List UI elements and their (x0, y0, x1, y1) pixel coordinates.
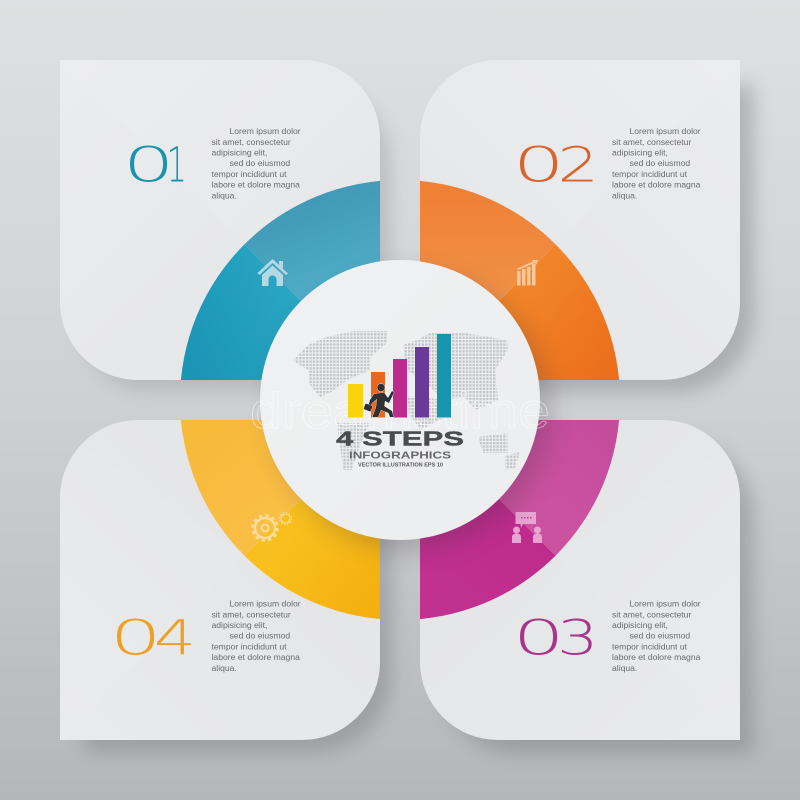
panel 4: step 04 (60, 420, 380, 740)
number: 02: 0 (513, 137, 565, 193)
text block: step 02: tempor incididunt ut (612, 169, 688, 179)
icon: running businessman (364, 384, 394, 417)
number: 04: 0 (110, 610, 162, 666)
text block: step 04: Lorem ipsum dolor (230, 598, 301, 608)
text block: step 02: aliqua. (612, 190, 637, 200)
text block: step 01: labore et dolore magna (212, 180, 300, 190)
watermark: dreamstime (250, 383, 550, 439)
text block: step 04: aliqua. (212, 663, 237, 673)
subtitle: INFOGRAPHICS (349, 450, 451, 462)
text block: step 02: sed do eiusmod (630, 158, 690, 168)
title: 4 STEPS (336, 428, 464, 450)
text block: step 01: sed do eiusmod (230, 158, 290, 168)
text block: step 04: sed do eiusmod (230, 631, 290, 641)
icon: two people talking (512, 512, 542, 543)
text block: step 04: adipisicing elit, (212, 620, 267, 630)
number: 03 (513, 610, 599, 666)
number: 02 (513, 137, 599, 193)
text block: step 01: tempor incididunt ut (212, 169, 287, 179)
text block: step 03: tempor incididunt ut (612, 641, 688, 651)
center circle shadow (271, 271, 551, 551)
panel 2: step 02 (420, 60, 740, 380)
panel shadows (80, 85, 754, 754)
ring segment: orange (420, 180, 620, 380)
text block: step 03: sit amet, consectetur (612, 609, 691, 619)
text block: step 02: Lorem ipsum dolor (630, 126, 701, 136)
text block: step 01: Lorem ipsum dolor (230, 126, 301, 136)
ring segment: magenta (420, 420, 620, 620)
number: 02: 2 (558, 137, 599, 193)
icon: rising bar chart (517, 260, 538, 286)
number: 01: 0 (123, 137, 175, 193)
icon: house (258, 259, 288, 286)
text block: step 01: aliqua. (212, 190, 237, 200)
text block: step 01: sit amet, consectetur (212, 137, 291, 147)
number: 04: 4 (154, 610, 196, 666)
text block: step 04: labore et dolore magna (212, 652, 300, 662)
icon: gears (252, 512, 292, 540)
number: 03: 0 (513, 610, 565, 666)
number: 03: 3 (557, 610, 599, 666)
panel 3: step 03 (420, 420, 740, 740)
text block: step 03: Lorem ipsum dolor (630, 598, 701, 608)
text block: step 02: sit amet, consectetur (612, 137, 691, 147)
ring segment: yellow (180, 420, 380, 620)
text block: step 01: adipisicing elit, (212, 148, 267, 158)
number: 01: 1 (166, 137, 187, 193)
text block: step 04: tempor incididunt ut (212, 641, 287, 651)
center circle (250, 260, 550, 540)
caption: VECTOR ILLUSTRATION EPS 10 (358, 462, 443, 468)
text block: step 03: adipisicing elit, (612, 620, 668, 630)
dotted world map (293, 331, 520, 470)
panel 1: step 01 (60, 60, 380, 380)
number: 04 (110, 610, 196, 666)
text block: step 02: labore et dolore magna (612, 180, 701, 190)
text block: step 03: labore et dolore magna (612, 652, 701, 662)
text block: step 03: sed do eiusmod (630, 631, 690, 641)
bar chart (348, 334, 451, 418)
ring segment: teal (180, 180, 380, 380)
text block: step 04: sit amet, consectetur (212, 609, 291, 619)
text block: step 02: adipisicing elit, (612, 148, 668, 158)
text block: step 03: aliqua. (612, 663, 637, 673)
